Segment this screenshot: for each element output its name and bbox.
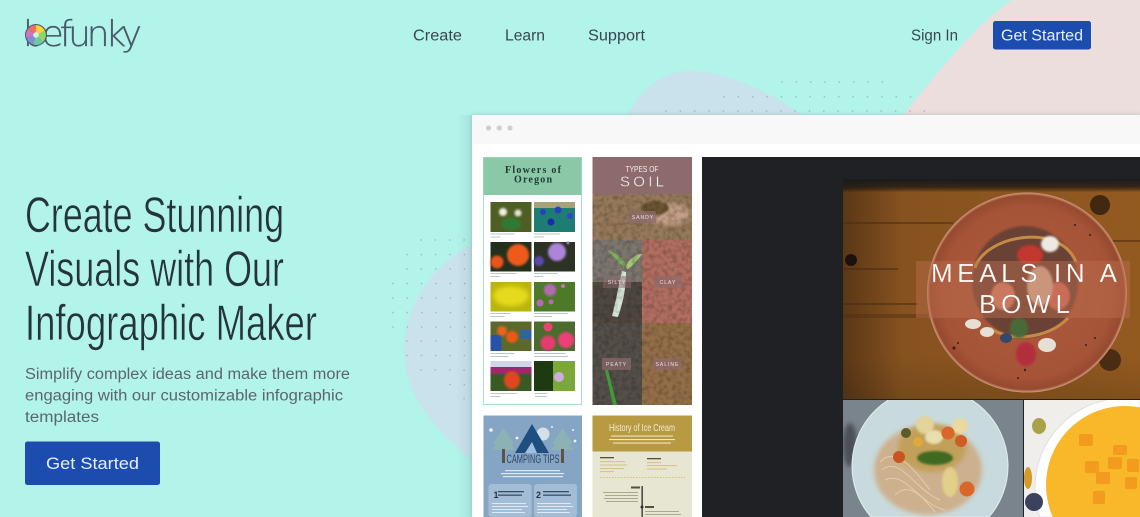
soil labels: PEATY xyxy=(606,362,627,368)
card: Types of Soil xyxy=(592,157,692,405)
card intro lines xyxy=(609,436,675,444)
window title bar xyxy=(472,115,1140,144)
card title xyxy=(505,165,562,186)
right-edge soft fade of window over background xyxy=(456,115,472,517)
camping intro lines xyxy=(501,470,564,477)
soil labels: SALINE xyxy=(656,362,679,368)
timeline xyxy=(603,486,681,517)
card title: TYPES OF xyxy=(626,165,659,174)
photo title: MEALS IN A xyxy=(931,258,1118,288)
photo: Meals in a Bowl xyxy=(843,179,1140,399)
photo title: BOWL xyxy=(979,289,1070,319)
pancakes and fruit xyxy=(965,226,1078,366)
photo: soup bowl xyxy=(1024,398,1140,517)
did you know columns xyxy=(600,457,685,478)
nav button: Get Started xyxy=(993,21,1091,50)
card: Flowers of Oregon xyxy=(484,158,582,404)
heading: Infographic Maker xyxy=(25,295,317,351)
soil labels: SANDY xyxy=(632,215,654,221)
card: History of Ice Cream xyxy=(592,416,692,517)
tip boxes xyxy=(488,484,577,517)
soil labels: CLAY xyxy=(660,280,676,286)
card title: Flowers of xyxy=(505,165,562,176)
app window xyxy=(472,115,1140,517)
navigation links: Create xyxy=(413,28,462,44)
subheading text: engaging with our customizable infographic xyxy=(25,388,343,404)
card title: Oregon xyxy=(514,174,552,186)
translucent title band xyxy=(916,261,1130,318)
heading xyxy=(25,187,317,351)
decorative dot grids xyxy=(393,82,932,398)
background shape: pink corner xyxy=(903,0,1140,115)
card title xyxy=(620,165,664,190)
noodle strands xyxy=(880,456,945,512)
navigation links: Learn xyxy=(505,28,545,44)
background shape: blue blob xyxy=(404,71,802,460)
tip boxes: 2 xyxy=(536,490,541,500)
soil photos xyxy=(592,194,692,405)
heading: Visuals with Our xyxy=(25,241,284,297)
plate speckles xyxy=(952,224,1096,379)
flower photo grid xyxy=(490,202,575,397)
plate xyxy=(927,192,1127,392)
icon: stars xyxy=(489,426,576,442)
card title: History of Ice Cream xyxy=(609,422,675,434)
subheading text: Simplify complex ideas and make them more xyxy=(25,366,350,383)
icon: colour wheel xyxy=(25,24,47,46)
navigation links xyxy=(413,28,958,44)
hero button: Get Started xyxy=(25,442,160,485)
navigation links: Support xyxy=(588,28,646,44)
soil labels xyxy=(602,211,682,370)
icon: pine trees xyxy=(492,428,574,463)
card: Camping Tips xyxy=(484,416,582,517)
hero button: Get Started: Get Started xyxy=(46,454,139,473)
photo title xyxy=(933,264,1117,314)
subheading text xyxy=(25,366,350,426)
heading: Create Stunning xyxy=(25,187,284,243)
photo: pasta plate xyxy=(843,388,1023,517)
logo: befunky: befunky xyxy=(23,14,142,55)
nav button: Get Started: Get Started xyxy=(1001,28,1083,44)
flower captions xyxy=(490,234,568,397)
subheading text: templates xyxy=(25,409,99,426)
soil labels: SILTY xyxy=(608,280,626,286)
navigation links: Sign In xyxy=(911,28,958,44)
icon: tent xyxy=(515,424,549,453)
icon: moon xyxy=(536,428,550,440)
card title: SOIL xyxy=(620,174,664,190)
camping title: CAMPING TIPS xyxy=(506,452,560,466)
editor canvas xyxy=(702,157,1140,517)
tip boxes: 1 xyxy=(494,490,499,500)
